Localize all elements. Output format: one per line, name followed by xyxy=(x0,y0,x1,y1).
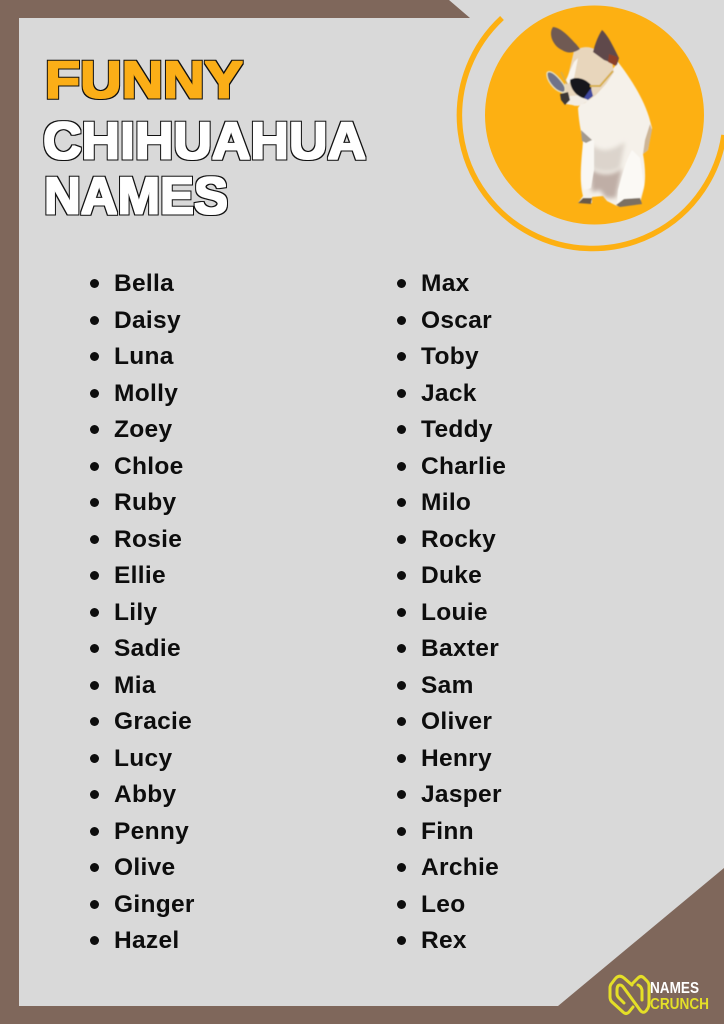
yellow circle xyxy=(485,6,704,224)
icon: chihuahua with sunglasses xyxy=(547,27,652,207)
names list: left column: Luna xyxy=(114,343,174,370)
names list: right column: Sam xyxy=(421,672,474,698)
body xyxy=(578,62,652,206)
names list: right column: Finn xyxy=(421,818,474,844)
logo text: CRUNCH xyxy=(650,996,709,1013)
names list: left column: Zoey xyxy=(114,416,172,443)
names list: left column: Rosie xyxy=(114,526,182,552)
names list: left column: Gracie xyxy=(114,708,192,735)
left ear xyxy=(551,27,580,53)
names list: right column: Oscar xyxy=(421,306,492,334)
names list: right column: Toby xyxy=(421,343,479,370)
title: NAMES xyxy=(44,168,228,226)
names list: right column: Oliver xyxy=(421,708,492,735)
names list: right column: Jack xyxy=(421,380,477,406)
names list: left column: Abby xyxy=(114,781,176,808)
title: CHIHUAHUA xyxy=(43,112,366,170)
names list: left column: Ellie xyxy=(114,562,166,589)
names list: left column: Bella xyxy=(114,270,174,297)
logo text xyxy=(650,980,709,1013)
glasses xyxy=(547,72,565,92)
snout xyxy=(560,92,570,105)
haunch xyxy=(643,124,652,154)
names list: right column: Duke xyxy=(421,562,482,589)
names list: left column: Daisy xyxy=(114,306,181,334)
names list: right column xyxy=(397,270,506,954)
names list: left column: Lucy xyxy=(114,744,172,772)
names list: left column: Olive xyxy=(114,854,175,881)
logo: Names Crunch xyxy=(610,976,709,1014)
right foreleg xyxy=(617,150,644,205)
head xyxy=(562,47,614,106)
chest shadow xyxy=(581,130,592,143)
names list: left column: Chloe xyxy=(114,452,184,480)
names list: left column: Hazel xyxy=(114,927,180,954)
names list: right column: Teddy xyxy=(421,416,493,443)
names list: right column: Louie xyxy=(421,598,488,626)
names list: right column: Rocky xyxy=(421,526,496,552)
names list: left column: Ruby xyxy=(114,489,176,516)
names list: right column: Archie xyxy=(421,854,499,881)
right ear xyxy=(593,30,619,65)
names list: left column xyxy=(90,270,195,954)
title: FUNNY xyxy=(45,52,243,110)
names list: right column: Jasper xyxy=(421,781,502,808)
paws xyxy=(578,198,592,204)
names list: right column: Rex xyxy=(421,927,467,954)
names list: left column: Lily xyxy=(114,598,157,626)
belly shading xyxy=(590,168,622,198)
names list: left column: Ginger xyxy=(114,890,195,918)
names list: right column: Henry xyxy=(421,744,492,772)
names list: left column: Sadie xyxy=(114,635,181,662)
names list: right column: Baxter xyxy=(421,635,499,662)
ring arc xyxy=(459,18,724,249)
names list: left column: Penny xyxy=(114,818,189,844)
icon: N mark xyxy=(610,976,649,1014)
names list: left column: Mia xyxy=(114,672,156,698)
title xyxy=(43,52,366,226)
logo text: NAMES xyxy=(650,980,699,997)
left foreleg xyxy=(581,140,594,190)
names list: right column: Charlie xyxy=(421,452,506,480)
names list: right column: Milo xyxy=(421,489,471,516)
names list: right column: Max xyxy=(421,270,470,297)
names list: right column: Leo xyxy=(421,890,465,918)
names list: left column: Molly xyxy=(114,380,178,406)
